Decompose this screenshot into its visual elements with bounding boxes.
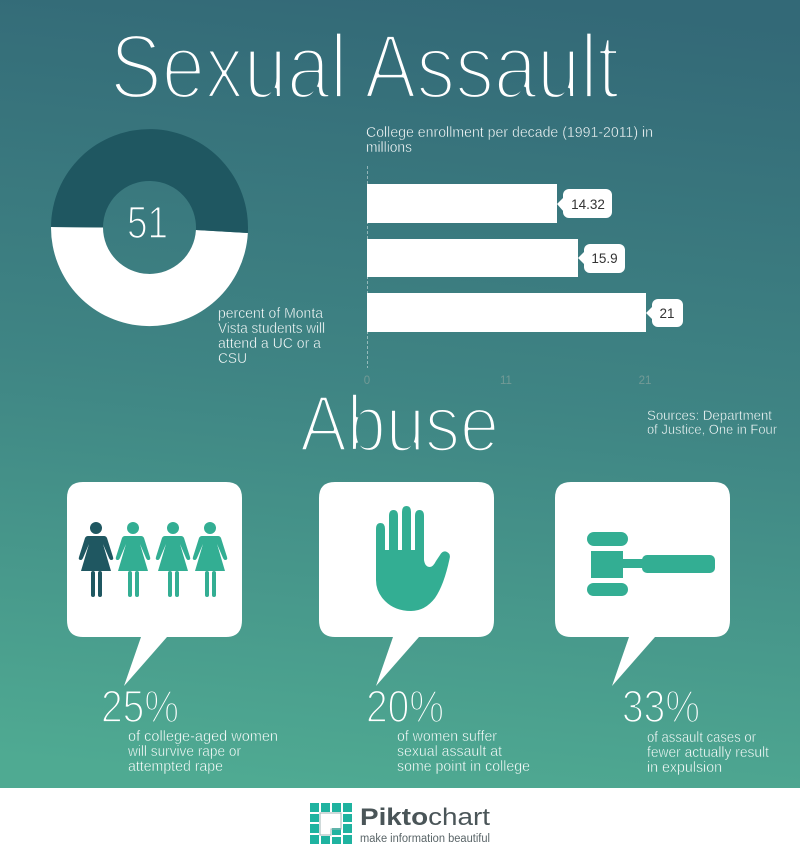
bar 14.32 <box>367 184 612 223</box>
stat description: attempted rape <box>128 759 223 775</box>
axis labels: 11 <box>500 375 512 387</box>
bar 15.9 <box>367 239 625 277</box>
bar 21 <box>367 293 683 332</box>
title: Sexual Assault <box>110 16 619 118</box>
chart title <box>366 125 653 156</box>
donut white segment <box>51 227 248 326</box>
sources: Sources: Department <box>647 407 772 423</box>
donut dark segment <box>51 129 248 233</box>
stat value: 25% <box>101 681 179 732</box>
bar chart <box>364 125 683 387</box>
logo wordmark: Pikto chart <box>360 804 490 831</box>
footer logo <box>310 803 490 845</box>
donut caption: CSU <box>218 351 247 367</box>
icon: four women <box>79 522 227 597</box>
sources <box>647 407 777 437</box>
panel: 25% stat <box>67 482 278 775</box>
axis labels: 21 <box>639 375 651 387</box>
stat value: 33% <box>622 681 700 732</box>
panel: 33% stat <box>555 482 769 776</box>
axis line <box>366 166 368 368</box>
axis labels: 0 <box>364 375 370 387</box>
stat description: in expulsion <box>647 760 722 776</box>
donut caption: percent of Monta <box>218 306 324 322</box>
stat description: of women suffer <box>397 729 497 745</box>
stat description <box>127 729 278 775</box>
speech bubble <box>555 482 730 686</box>
speech bubble <box>67 482 242 686</box>
logo mark <box>310 803 352 844</box>
panel: 20% stat <box>319 482 530 775</box>
bar 15.9: 15.9 <box>591 251 618 266</box>
donut chart <box>51 129 248 326</box>
speech bubble <box>319 482 494 686</box>
bar 21: 21 <box>659 306 675 321</box>
stat description: some point in college <box>397 759 530 775</box>
donut caption <box>218 306 325 367</box>
logo tagline: make information beautiful <box>360 833 490 845</box>
chart title: College enrollment per decade (1991-2011) in <box>366 125 653 141</box>
chart title: millions <box>366 140 412 156</box>
stat description: sexual assault at <box>397 744 502 760</box>
icon: raised hand <box>376 506 450 611</box>
icon: gavel <box>587 532 715 596</box>
axis labels <box>364 375 651 387</box>
stat description <box>647 730 769 776</box>
bar 14.32: 14.32 <box>571 197 605 212</box>
donut caption: Vista students will <box>218 321 325 337</box>
stat description: of college-aged women <box>128 729 278 745</box>
stat description <box>397 729 530 775</box>
stat description: fewer actually result <box>647 745 769 761</box>
donut value: 51 <box>127 197 168 248</box>
heading: abuse: Abuse <box>300 379 499 468</box>
stat description: will survive rape or <box>127 744 241 760</box>
donut caption: attend a UC or a <box>218 336 322 352</box>
stat value: 20% <box>366 681 444 732</box>
stat description: of assault cases or <box>647 730 756 746</box>
sources: of Justice, One in Four <box>647 421 777 437</box>
